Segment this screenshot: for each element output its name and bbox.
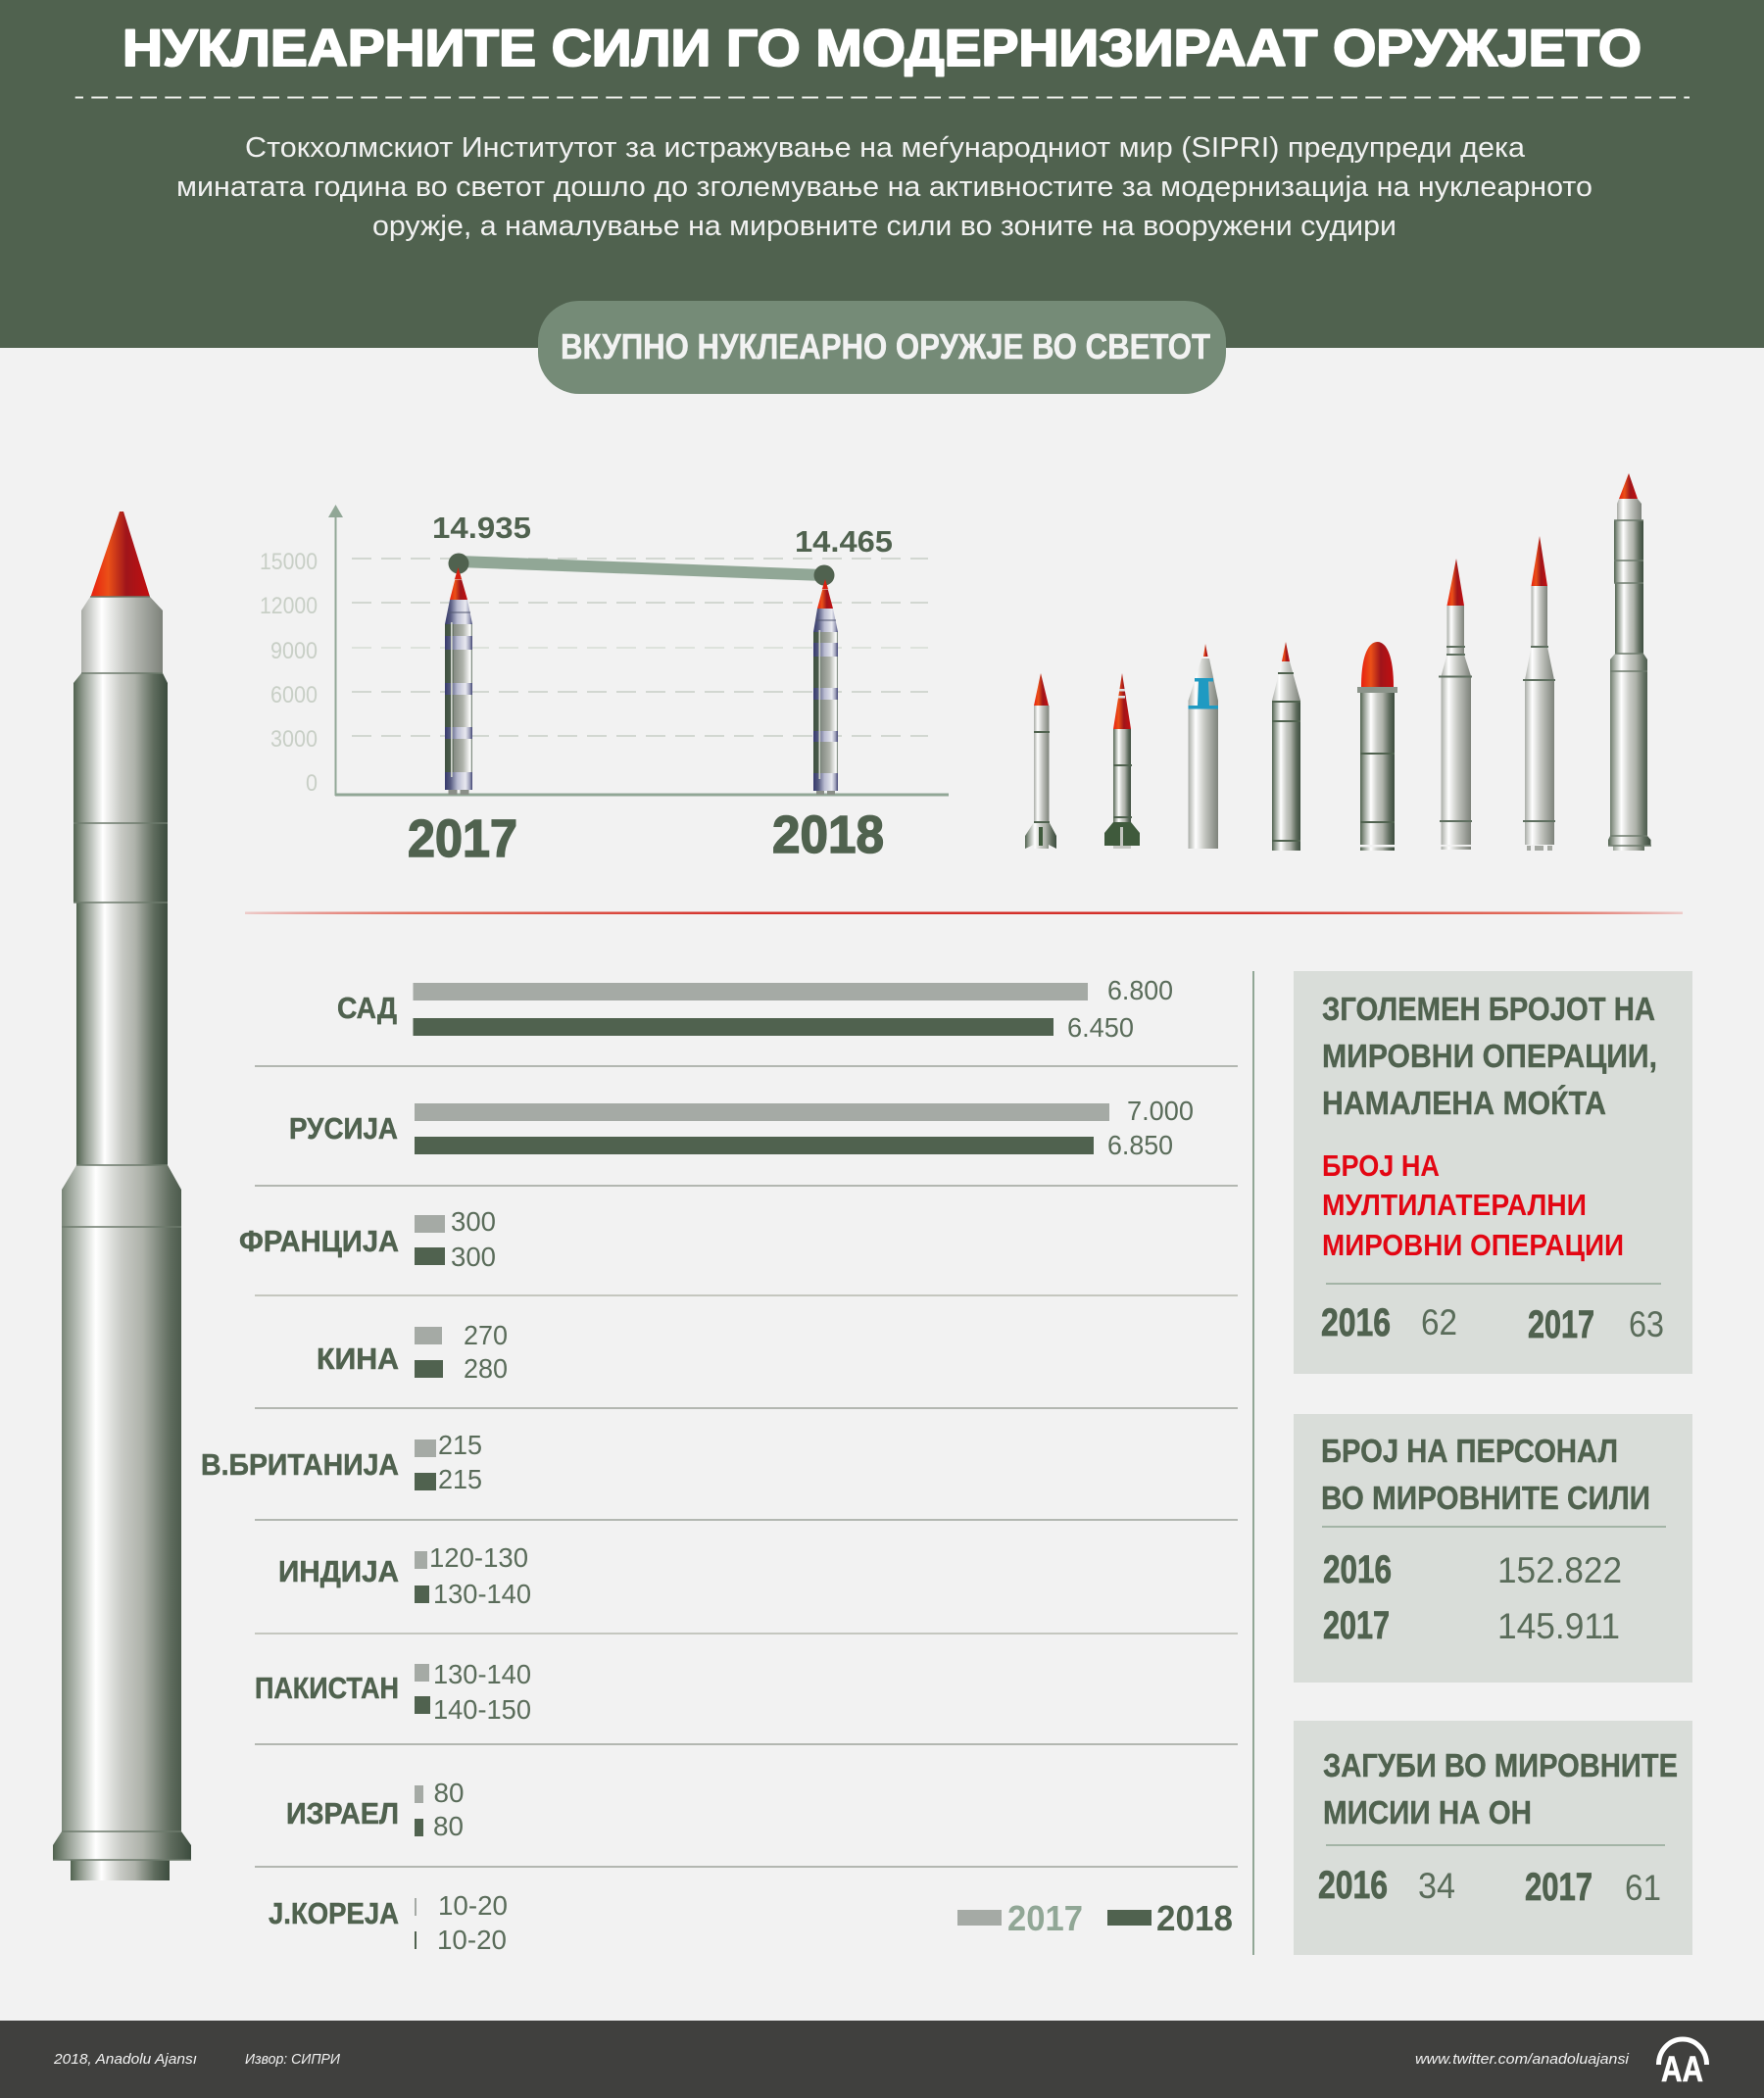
panel heading: МИСИИ НА ОН: [1323, 1794, 1532, 1830]
missile 5: [1357, 642, 1397, 851]
credit: 2018, Anadolu Ajansı: [53, 2051, 197, 2068]
panel heading: ЗГОЛЕМЕН БРОЈОТ НА: [1322, 991, 1655, 1027]
bar chart: warheads by country: [201, 975, 1238, 1955]
title: НУКЛЕАРНИТЕ СИЛИ ГО МОДЕРНИЗИРААТ ОРУЖЈЕТО: [122, 20, 1642, 77]
missile 3: [1188, 644, 1218, 849]
row: ИЗРАЕЛ: [286, 1778, 465, 1841]
row: КИНА: КИНА: [317, 1342, 399, 1376]
row: ФРАНЦИЈА: ФРАНЦИЈА: [239, 1224, 399, 1258]
row: ИНДИЈА: [278, 1542, 531, 1609]
panel: header: [0, 0, 1764, 348]
row: В.БРИТАНИЈА: [201, 1430, 482, 1494]
row: ФРАНЦИЈА: 300: [451, 1242, 496, 1272]
y axis labels: 3000: [270, 726, 318, 753]
row: Ј.КОРЕЈА: 10-20: [437, 1925, 507, 1955]
row: САД: 6.450: [1067, 1012, 1134, 1043]
trend line: [459, 556, 823, 581]
year: 2017: 2017: [408, 809, 517, 868]
source: Извор: СИПРИ: [245, 2051, 340, 2068]
panel heading: НАМАЛЕНА МОЌТА: [1322, 1085, 1606, 1121]
panel heading: БРОЈ НА ПЕРСОНАЛ: [1321, 1433, 1618, 1469]
panel: peacekeeping personnel: [1294, 1414, 1692, 1683]
icon: large missile: [53, 512, 191, 1880]
panel heading: [1323, 1747, 1678, 1830]
row: ИНДИЈА: 130-140: [433, 1579, 531, 1609]
y axis labels: [260, 549, 318, 797]
row: РУСИЈА: 7.000: [1127, 1096, 1194, 1126]
panel: peacekeeping operations: [1294, 971, 1692, 1374]
row: ПАКИСТАН: [255, 1659, 531, 1725]
stats: 2017: [1323, 1604, 1390, 1647]
y axis labels: 9000: [270, 638, 318, 664]
legend: [957, 1898, 1233, 1938]
red subheading: БРОЈ НА: [1322, 1148, 1440, 1183]
missile 7: [1523, 536, 1555, 851]
row: ФРАНЦИЈА: 300: [451, 1206, 496, 1237]
y axis labels: 0: [306, 770, 318, 797]
year: 2018: 2018: [772, 805, 884, 864]
y axis labels: 6000: [270, 682, 318, 708]
stats: 2016: [1318, 1864, 1388, 1907]
intro text: минатата година во светот дошло до зголемување на активностите за модернизација на нуклеарното: [176, 171, 1592, 203]
stats: 2017: [1525, 1866, 1592, 1909]
intro text: [176, 132, 1592, 242]
row: Ј.КОРЕЈА: 10-20: [438, 1890, 508, 1921]
data point: 2018: [813, 564, 835, 586]
stats: 152.822: [1497, 1550, 1622, 1590]
intro text: Стокхолмскиот Институтот за истражување на меѓународниот мир (SIPRI) предупреди дека: [245, 132, 1526, 164]
row: РУСИЈА: [289, 1096, 1194, 1160]
row: Ј.КОРЕЈА: [269, 1890, 508, 1955]
y axis labels: 12000: [260, 593, 318, 619]
icon: AA logo: [1658, 2039, 1707, 2089]
stats: 2016: [1321, 1301, 1391, 1344]
value: 14.465: 14.465: [795, 524, 893, 559]
icons: row of missiles: [1025, 473, 1651, 851]
stats: 2016: [1323, 1548, 1392, 1591]
stats: 61: [1625, 1868, 1661, 1908]
missile 8: [1608, 473, 1651, 851]
line chart: total warheads 2017-2018: [260, 505, 949, 868]
panel heading: ВО МИРОВНИТЕ СИЛИ: [1321, 1480, 1650, 1516]
row: КИНА: 270: [464, 1320, 508, 1350]
stats: [1318, 1864, 1661, 1909]
red subheading: [1322, 1148, 1624, 1262]
panel heading: МИРОВНИ ОПЕРАЦИИ,: [1322, 1038, 1657, 1074]
row: КИНА: [317, 1320, 508, 1384]
row: ПАКИСТАН: 140-150: [433, 1694, 531, 1725]
missile 4: [1272, 642, 1300, 851]
panel heading: [1321, 1433, 1650, 1516]
legend: 2017: [1007, 1898, 1083, 1938]
footer: [0, 2021, 1764, 2098]
row: ИНДИЈА: ИНДИЈА: [278, 1554, 399, 1588]
row: ФРАНЦИЈА: [239, 1206, 496, 1272]
panel heading: ЗАГУБИ ВО МИРОВНИТЕ: [1323, 1747, 1678, 1783]
stats: [1323, 1548, 1622, 1647]
row: ИЗРАЕЛ: ИЗРАЕЛ: [286, 1796, 399, 1830]
heading pill: total nuclear weapons: [538, 301, 1226, 394]
row: ИНДИЈА: 120-130: [429, 1542, 528, 1573]
panel: losses in UN missions: [1294, 1721, 1692, 1955]
row: САД: САД: [337, 991, 397, 1025]
missile 1: [1025, 673, 1056, 849]
legend: 2018: [1156, 1898, 1233, 1938]
row: ПАКИСТАН: 130-140: [433, 1659, 531, 1689]
missile bar: 2018: [813, 579, 838, 795]
y axis labels: 15000: [260, 549, 318, 575]
row: Ј.КОРЕЈА: Ј.КОРЕЈА: [269, 1896, 399, 1930]
row: ПАКИСТАН: ПАКИСТАН: [255, 1671, 399, 1705]
row: САД: 6.800: [1107, 975, 1173, 1005]
row: В.БРИТАНИЈА: 215: [438, 1430, 482, 1460]
stats: [1321, 1301, 1664, 1346]
red subheading: МУЛТИЛАТЕРАЛНИ: [1322, 1188, 1587, 1222]
row: ИЗРАЕЛ: 80: [433, 1778, 465, 1808]
row: РУСИЈА: 6.850: [1107, 1130, 1173, 1160]
stats: 62: [1421, 1302, 1457, 1342]
data point: 2017: [449, 553, 468, 574]
missile 2: [1104, 673, 1140, 849]
value: 14.935: 14.935: [432, 511, 531, 545]
row: ИЗРАЕЛ: 80: [433, 1811, 464, 1841]
intro text: оружје, а намалување на мировните сили во зоните на вооружени судири: [372, 211, 1396, 242]
twitter url: www.twitter.com/anadoluajansi: [1415, 2051, 1630, 2068]
stats: 2017: [1528, 1303, 1594, 1346]
icon: AA logo: AA: [1661, 2049, 1703, 2089]
stats: 145.911: [1497, 1606, 1620, 1646]
row: В.БРИТАНИЈА: 215: [438, 1464, 482, 1494]
heading pill: total nuclear weapons: ВКУПНО НУКЛЕАРНО ОРУЖЈЕ ВО СВЕТОТ: [561, 326, 1210, 366]
missile bar: 2017: [445, 567, 472, 795]
row: РУСИЈА: РУСИЈА: [289, 1111, 398, 1146]
stats: 63: [1629, 1304, 1664, 1344]
row: САД: [337, 975, 1173, 1043]
row: КИНА: 280: [464, 1353, 508, 1384]
panel heading: [1322, 991, 1657, 1121]
missile 6: [1439, 559, 1472, 850]
row: В.БРИТАНИЈА: В.БРИТАНИЈА: [201, 1447, 399, 1482]
red subheading: МИРОВНИ ОПЕРАЦИИ: [1322, 1228, 1624, 1262]
y axis and arrow: [328, 505, 949, 796]
stats: 34: [1418, 1866, 1455, 1906]
